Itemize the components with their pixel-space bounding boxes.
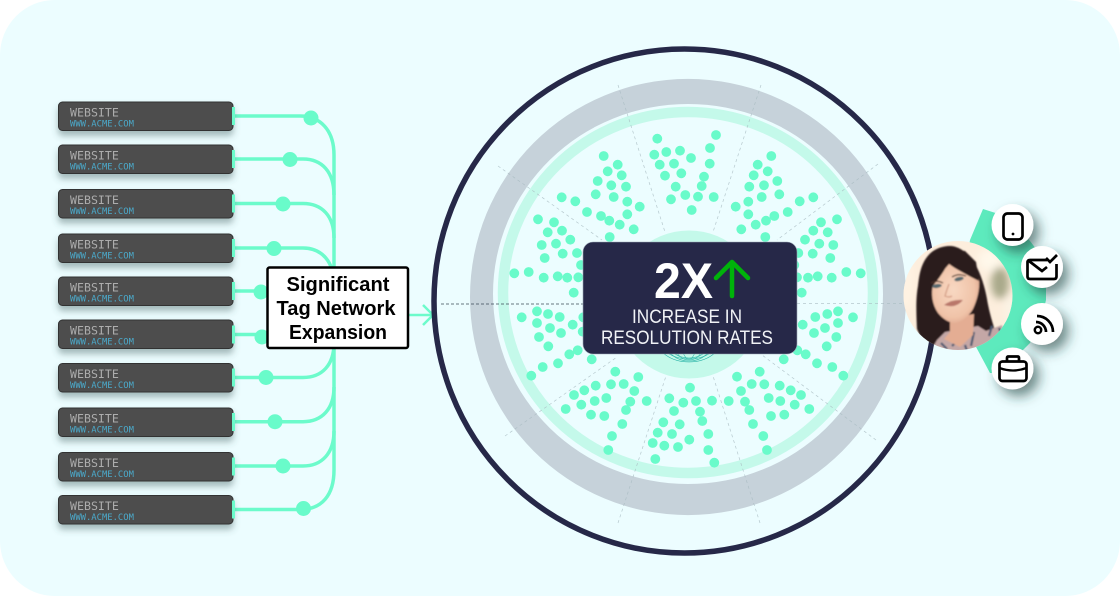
caption bbox=[601, 306, 773, 349]
website card 7 bbox=[58, 364, 235, 392]
website list bbox=[58, 102, 235, 524]
fringe bbox=[931, 250, 979, 288]
website card 1: WEBSITE bbox=[70, 106, 119, 120]
website card 2: WWW.ACME.COM bbox=[70, 162, 134, 172]
central mesh sphere bbox=[657, 318, 721, 362]
segment: lower left bbox=[561, 367, 652, 455]
mint ring bbox=[503, 112, 873, 473]
website card 6: WEBSITE bbox=[70, 324, 119, 338]
segment: right lower bbox=[779, 306, 858, 381]
icon: briefcase bbox=[992, 348, 1034, 390]
website card 6 bbox=[58, 320, 235, 348]
website card 10 bbox=[58, 496, 235, 524]
label: significant tag network expansion: Tag Network bbox=[276, 298, 396, 320]
website card 9 bbox=[58, 452, 235, 481]
connector nodes bbox=[254, 110, 318, 516]
segment: top bbox=[649, 130, 721, 215]
website card 1 bbox=[58, 102, 235, 130]
website card 3: WEBSITE bbox=[70, 193, 119, 207]
portrait photo bbox=[899, 240, 1016, 352]
label: significant tag network expansion: Expansion bbox=[289, 322, 387, 344]
website card 4 bbox=[58, 234, 235, 262]
channel icons bbox=[992, 204, 1063, 390]
label: significant tag network expansion bbox=[268, 268, 408, 348]
website card 5: WWW.ACME.COM bbox=[70, 294, 134, 304]
segment: right upper bbox=[789, 214, 866, 298]
segment: upper left bbox=[557, 151, 645, 242]
website card 9: WEBSITE bbox=[70, 456, 119, 470]
icon: phone bbox=[992, 204, 1034, 246]
segment: lower right bbox=[724, 367, 814, 455]
caption: INCREASE IN bbox=[632, 306, 742, 328]
label: significant tag network expansion: Significant bbox=[286, 274, 390, 296]
segment: upper right bbox=[731, 151, 818, 242]
face bbox=[932, 263, 979, 323]
dot cloud bbox=[509, 130, 866, 468]
website card 6: WWW.ACME.COM bbox=[70, 338, 134, 348]
website card 4: WWW.ACME.COM bbox=[70, 252, 134, 262]
segment: left upper bbox=[509, 214, 586, 298]
website card 9: WWW.ACME.COM bbox=[70, 470, 134, 480]
icon: rss feed bbox=[1021, 303, 1063, 345]
website card 8: WWW.ACME.COM bbox=[70, 426, 134, 436]
stat: 2X: 2X bbox=[654, 253, 713, 309]
hair bbox=[916, 246, 997, 350]
website card 7: WEBSITE bbox=[70, 367, 119, 381]
lips bbox=[944, 300, 963, 306]
eyes bbox=[932, 283, 942, 289]
website card 2: WEBSITE bbox=[70, 148, 119, 162]
website card 8: WEBSITE bbox=[70, 412, 119, 426]
icon: email with check bbox=[1021, 246, 1063, 288]
nose shadow bbox=[945, 284, 952, 297]
website card 1: WWW.ACME.COM bbox=[70, 120, 134, 130]
segment: left lower bbox=[517, 306, 597, 381]
website card 5: WEBSITE bbox=[70, 280, 119, 294]
connector network bbox=[233, 116, 334, 510]
gray ring bbox=[470, 79, 906, 515]
dashed segment dividers bbox=[498, 85, 905, 523]
website card 2 bbox=[58, 145, 235, 174]
website card 10: WEBSITE bbox=[70, 499, 119, 513]
neck bbox=[944, 314, 974, 347]
website card 8 bbox=[58, 408, 235, 436]
website card 3 bbox=[58, 190, 235, 218]
website card 7: WWW.ACME.COM bbox=[70, 381, 134, 391]
outer navy ring bbox=[434, 49, 935, 553]
dashed line from arrow bbox=[441, 303, 583, 305]
website card 3: WWW.ACME.COM bbox=[70, 207, 134, 217]
icon: green up arrow bbox=[716, 262, 748, 296]
shirt bbox=[933, 324, 1003, 350]
teal wedge behind channels bbox=[960, 209, 1046, 373]
caption: RESOLUTION RATES bbox=[601, 327, 773, 349]
stat card bbox=[583, 242, 797, 354]
website card 4: WEBSITE bbox=[70, 238, 119, 252]
website card 10: WWW.ACME.COM bbox=[70, 513, 134, 523]
arrow: into the circle bbox=[405, 305, 433, 325]
website card 5 bbox=[58, 277, 235, 306]
segment: bottom bbox=[648, 383, 719, 468]
central mint disc bbox=[615, 230, 763, 378]
